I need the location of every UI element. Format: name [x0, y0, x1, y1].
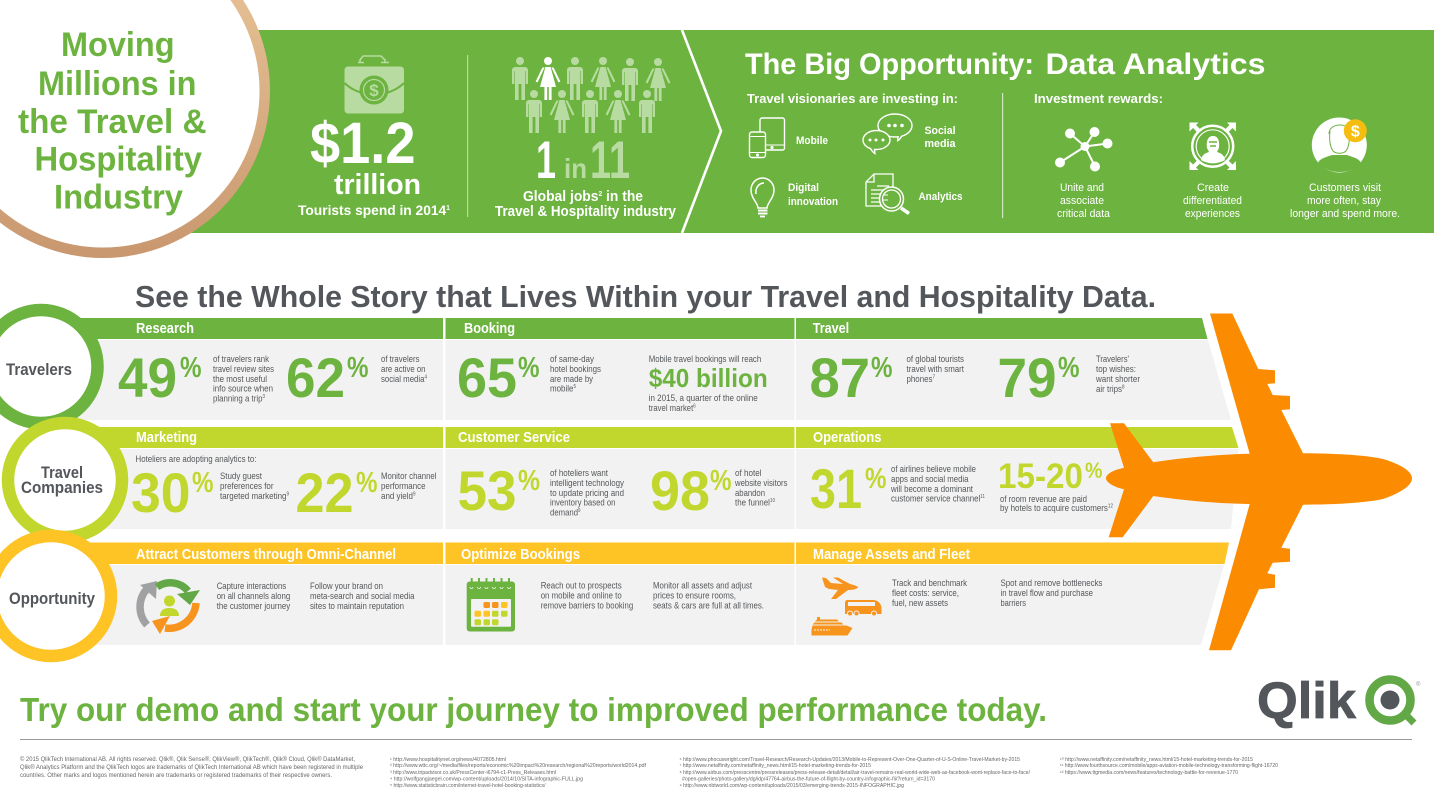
panel: manage assets and fleet — [812, 546, 1103, 636]
text: unite and associate — [1057, 182, 1111, 220]
panel: marketing: and yield — [381, 491, 419, 502]
panel: attract customers: Capture interactions — [217, 581, 286, 592]
panel: optimize bookings — [461, 546, 764, 632]
panel: booking: % — [518, 352, 540, 384]
panel: booking: $40 billion — [649, 363, 768, 393]
panel: customer service: 10 — [770, 498, 775, 504]
text: customers visit more often: longer and spend more. — [1290, 208, 1400, 220]
title: Hospitality — [34, 140, 202, 178]
heading: the big opportunity: Data Analytics — [1046, 48, 1266, 81]
panel: optimize bookings: Reach out to prospects — [541, 580, 622, 592]
stat: 1.2 trillion tourists spend: $1.2 — [310, 111, 416, 176]
stat: 1.2 trillion tourists spend: Tourists spend in 2014 — [298, 202, 449, 218]
circle: opportunity: Opportunity — [9, 589, 95, 608]
panel: marketing: 22 — [296, 461, 354, 524]
panel: travel: 7 — [932, 374, 935, 380]
panel: marketing: 9 — [413, 492, 416, 498]
panel: travel: Travel — [813, 320, 849, 337]
references column 2: ⁸ http://www.airbus.com/presscentre/pressreleases/press-release-detail/detail/air-travel-remains-real-world-wide-web-as-facebook-wont-replace-face-to-face/ — [680, 770, 1031, 776]
icon: customer with dollar coin: $ — [1351, 124, 1360, 140]
panel: manage assets and fleet: fleet costs: service, — [892, 588, 959, 599]
row backgrounds — [70, 427, 1238, 529]
panel: operations: of room revenue are paid — [1000, 494, 1087, 505]
panel: attract customers — [136, 546, 415, 634]
panel: travel: % — [871, 352, 893, 384]
panel: manage assets and fleet: Spot and remove bottlenecks — [1000, 578, 1103, 589]
panel: operations: 11 — [980, 494, 985, 500]
panel: booking: travel market — [649, 403, 704, 414]
references column 2: ⁹ http://www.nbtworld.com/wp-content/uploads/2015/03/emerging-trends-2015-INFOGRAPHIC.jpg — [680, 783, 904, 789]
row backgrounds — [60, 318, 1231, 420]
icon: small plane — [822, 578, 858, 599]
text: customers visit more often: Customers visit — [1309, 182, 1381, 194]
panel: marketing: Monitor channel — [381, 471, 436, 482]
references column 1: ⁴ http://wolfgangjaegel.com/wp-content/uploads/2014/10/SITA-infographic-FULL.jpg — [390, 776, 583, 782]
circle: travel companies — [8, 423, 122, 537]
panel: customer service: Customer Service — [458, 429, 570, 446]
panel: customer service: % — [518, 465, 540, 497]
panel: customer service: intelligent technology — [550, 478, 624, 489]
panel: marketing: performance — [381, 481, 426, 492]
panel: travel: air trips — [1096, 384, 1127, 395]
panel: manage assets and fleet: in travel flow and purchase — [1000, 588, 1093, 599]
panel: travel companies row — [70, 427, 1238, 529]
panel: operations: 12 — [1108, 504, 1113, 510]
references column 3: ¹² https://www.ttgmedia.com/news/features/technology-battle-for-revenue-1770 — [1060, 770, 1238, 776]
section heading: See the Whole Story that Lives Within your Travel and Hospitality Data. — [135, 279, 1156, 314]
icon: speech bubbles — [863, 114, 912, 154]
icon: customer with dollar coin — [1312, 118, 1367, 172]
panel: customer service: 53 — [458, 459, 516, 522]
panel: operations — [810, 429, 1113, 520]
panel: research: travel review sites — [213, 364, 274, 375]
text: create differentiated experiences: differentiated — [1183, 195, 1242, 207]
panel: travel: 87 — [810, 346, 870, 409]
label: mobile: Mobile — [796, 135, 828, 147]
stat: 1 in 11 global jobs — [495, 131, 676, 220]
heading: the big opportunity: The Big Opportunity: — [745, 48, 1034, 81]
stat: 1 in 11 global jobs: 11 — [590, 131, 630, 190]
panel: manage assets and fleet: barriers — [1000, 598, 1026, 609]
panel: research — [118, 320, 427, 409]
panel: optimize bookings: on mobile and online to — [541, 590, 622, 602]
panel: operations: of airlines believe mobile — [891, 464, 976, 475]
references column 1: ² http://www.wttc.org/~/media/files/reports/economic%20impact%20research/regional%20reports/world2014.pdf — [390, 763, 647, 769]
stat: 1 in 11 global jobs: 2 — [598, 191, 602, 198]
references column 2 — [680, 757, 1031, 789]
panel: marketing: targeted marketing — [220, 491, 300, 502]
panel: booking: 65 — [457, 346, 517, 409]
references column 1: ¹ http://www.hospitalitynet.org/news/4072805.html — [390, 757, 506, 763]
panel: operations: apps and social media — [891, 474, 969, 485]
text: create differentiated experiences: experiences — [1185, 208, 1240, 220]
legal copyright text: Qlik® Analytics Platform and the QlikTech logos are trademarks of QlikTech International AB which have been registered in multiple — [20, 764, 364, 771]
panel: operations: customer service channel — [891, 494, 1000, 504]
panel: marketing: 30 — [131, 461, 190, 524]
panel: travel: phones — [906, 374, 938, 385]
panel: attract customers: on all channels along — [217, 591, 290, 602]
panel: booking: hotel bookings — [550, 364, 601, 375]
subheading: investment rewards: Investment rewards: — [1034, 91, 1163, 106]
icon: briefcase with dollar — [344, 56, 404, 114]
panel: customer service: inventory based on — [550, 498, 616, 508]
stat: 1 in 11 global jobs: 1 — [536, 131, 556, 190]
panel: travel: Travelers' — [1096, 354, 1129, 365]
panel: research: info source when — [213, 384, 273, 394]
panel: customer service: to update pricing and — [550, 488, 624, 499]
text: create differentiated experiences — [1183, 182, 1242, 220]
title: the Travel & — [18, 103, 206, 141]
icon: cruise ship — [812, 617, 852, 636]
references column 1: ³ http://www.tripadvisor.co.uk/PressCenter-i6794-c1-Press_Releases.html — [390, 770, 556, 776]
panel: operations: % — [1085, 458, 1102, 483]
circle: travel companies: Companies — [21, 478, 103, 497]
references column 1 — [390, 757, 647, 789]
panel: attract customers: Attract Customers through Omni-Channel — [136, 546, 396, 563]
panel: marketing: Study guest — [220, 471, 262, 482]
chevron arrow divider — [682, 30, 721, 233]
panel: booking: 6 — [693, 404, 696, 410]
icon: bus — [845, 600, 882, 616]
icon: crowd of people, one highlighted — [512, 57, 670, 133]
panel: attract customers: meta-search and social media — [310, 591, 415, 602]
panel: research: planning a trip — [213, 394, 273, 404]
panel: travel: 79 — [998, 346, 1056, 409]
panel: customer service: website visitors — [734, 478, 788, 489]
icon: mobile devices — [750, 118, 784, 158]
panel: research: are active on — [381, 364, 426, 375]
references column 2: ⁷ http://www.netaffinity.com/netaffinity_news.html/15-hotel-marketing-trends-for-2015 — [680, 763, 871, 769]
panel: customer service: demand — [550, 508, 585, 518]
icon: briefcase with dollar: $ — [369, 81, 379, 100]
label: digital innovation: Digital — [788, 182, 819, 194]
label: digital innovation: innovation — [788, 196, 838, 208]
call to action: Try our demo and start your journey to improved performance today. — [20, 691, 1047, 728]
circle: opportunity — [0, 536, 111, 656]
panel: travelers row — [60, 318, 1231, 420]
panel: travel: of global tourists — [906, 354, 964, 365]
panel: research: social media — [381, 374, 434, 385]
legal copyright text: countries. Other marks and logos mentioned herein are trademarks or registered trademarks of their respective owners. — [20, 773, 332, 779]
text: unite and associate: critical data — [1057, 208, 1111, 220]
panel: optimize bookings: remove barriers to booking — [541, 600, 633, 612]
panel: operations: % — [865, 463, 887, 495]
panel: marketing: % — [192, 467, 214, 499]
panel: marketing — [131, 429, 436, 524]
references column 1: ⁵ http://www.statisticbrain.com/internet-travel-hotel-booking-statistics/ — [390, 783, 546, 789]
logo: Qlik: Qlik — [1257, 672, 1357, 729]
banner: key figures and big opportunity — [150, 30, 1434, 233]
panel: booking: Mobile travel bookings will reach — [649, 354, 761, 365]
circle: travelers: Travelers — [6, 360, 72, 379]
panel: research: 4 — [425, 374, 427, 380]
references column 2: ⁶ http://www.phocuswright.com/Travel-Research/Research-Updates/2013/Mobile-to-Represent-Over-One-Quarter-of-U-S-Online-Travel-Market-by-2015 — [680, 757, 1020, 763]
stat: 1.2 trillion tourists spend: trillion — [334, 169, 421, 201]
text: create differentiated experiences: Create — [1197, 182, 1229, 194]
panel: travel: % — [1058, 352, 1080, 384]
panel: customer service: 9 — [578, 508, 580, 514]
legal copyright text — [20, 756, 364, 779]
panel: optimize bookings: Optimize Bookings — [461, 546, 580, 563]
references column 3 — [1060, 757, 1278, 776]
panel: manage assets and fleet: Track and benchmark — [892, 578, 967, 589]
references column 2: #open-galleries/photo-gallery/dg/idp/47764-airbus-the-future-of-flight-by-country-infographic-fii/?return_id=3170 — [682, 776, 935, 782]
panel: attract customers: the customer journey — [217, 601, 290, 612]
panel: research: of travelers rank — [213, 354, 269, 365]
panel: research: 3 — [262, 394, 265, 400]
icon: customer cycle arrows — [140, 581, 200, 634]
stat: 1.2 trillion tourists spend — [298, 111, 450, 218]
circle: travel companies: Travel — [41, 463, 83, 482]
title circle — [0, 0, 270, 258]
stat: 1 in 11 global jobs: Travel & Hospitality industry — [495, 204, 676, 220]
icon: person in expanding frame — [1190, 122, 1236, 170]
panel: marketing: preferences for — [220, 481, 274, 492]
panel: travel: top wishes: — [1096, 364, 1136, 375]
panel: travel — [810, 320, 1141, 409]
panel: research: 49 — [118, 346, 177, 409]
stat: 1.2 trillion tourists spend: 1 — [446, 205, 450, 212]
text: unite and associate: Unite and — [1060, 182, 1104, 194]
panel: booking: Booking — [464, 320, 515, 337]
panel: customer service: % — [710, 465, 732, 497]
panel: optimize bookings: seats & cars are full at all times. — [653, 600, 764, 612]
panel: customer service: abandon — [735, 488, 765, 499]
legal copyright text: © 2015 QlikTech International AB. All rights reserved. Qlik®, Qlik Sense®, QlikView®, QlikTech®, Qlik® Cloud, Qlik® DataMarket, — [20, 756, 355, 763]
text: unite and associate: associate — [1060, 195, 1104, 207]
panel: opportunity row — [60, 542, 1229, 645]
title — [18, 26, 206, 216]
heading: the big opportunity — [745, 48, 1266, 81]
text: customers visit more often — [1290, 182, 1400, 220]
panel: booking: 5 — [573, 384, 576, 390]
panel: travel: travel with smart — [906, 364, 964, 375]
panel: booking: in 2015, a quarter of the online — [649, 393, 758, 404]
icon: network nodes — [1056, 128, 1112, 170]
panel: customer service: the funnel — [735, 498, 777, 508]
panel: booking — [457, 320, 768, 414]
panel: research: the most useful — [213, 374, 267, 385]
references column 3: ¹⁰ http://www.netaffinity.com/netaffinity_news.html/15-hotel-marketing-trends-for-2015 — [1060, 757, 1253, 763]
label: social media — [924, 125, 956, 150]
title: Moving — [61, 26, 174, 64]
title: Millions in — [38, 65, 196, 103]
panel: operations: will become a dominant — [890, 484, 973, 495]
panel: operations: 15-20 — [998, 457, 1083, 496]
panel: marketing: Hoteliers are adopting analytics to: — [136, 454, 256, 465]
stat: 1 in 11 global jobs: Global jobs — [523, 189, 602, 205]
panel: research: % — [347, 352, 369, 384]
text: customers visit more often: more often, stay — [1307, 195, 1381, 207]
panel: attract customers: Follow your brand on — [310, 581, 383, 592]
icon: document under magnifier — [866, 174, 909, 214]
label: social media: Social — [924, 125, 956, 137]
panel: customer service — [458, 429, 788, 522]
panel: operations: 31 — [810, 457, 862, 520]
panel: research: % — [180, 352, 202, 384]
stat: 1 in 11 global jobs: in — [564, 153, 587, 184]
panel: manage assets and fleet: Manage Assets and Fleet — [813, 546, 970, 563]
panel: customer service: of hotel — [735, 468, 762, 479]
panel: booking: of same-day — [550, 354, 594, 365]
panel: manage assets and fleet: fuel, new assets — [892, 598, 948, 609]
panel: marketing: % — [356, 467, 378, 499]
subheading: travel visionaries: Travel visionaries are investing in: — [747, 91, 958, 106]
panel: research: of travelers — [381, 354, 420, 365]
panel: travel: want shorter — [1095, 374, 1141, 385]
panel: marketing: Marketing — [136, 429, 197, 446]
panel: optimize bookings: prices to ensure rooms, — [653, 590, 736, 602]
panel: operations: by hotels to acquire customers — [1000, 503, 1130, 514]
panel: booking: mobile — [550, 384, 578, 394]
label: social media: media — [924, 138, 956, 150]
icon: light bulb — [751, 178, 774, 216]
panel: booking: are made by — [550, 374, 593, 385]
panel: customer service: of hoteliers want — [550, 468, 608, 479]
panel: operations: Operations — [813, 429, 882, 446]
panel: research: Research — [136, 320, 194, 337]
large orange airplane — [1106, 314, 1412, 650]
panel: marketing: 9 — [286, 492, 289, 498]
label: digital innovation — [788, 182, 838, 208]
panel: travel: 8 — [1122, 384, 1124, 390]
icon: calendar — [467, 578, 515, 632]
logo: Qlik — [1257, 672, 1421, 729]
label: analytics: Analytics — [918, 191, 962, 203]
stat: 1 in 11 global jobs: in the — [602, 189, 643, 205]
panel: attract customers: sites to maintain reputation — [310, 601, 404, 612]
panel: customer service: 98 — [650, 459, 710, 522]
title: Industry — [54, 178, 183, 216]
circle: travelers — [0, 310, 98, 423]
row backgrounds — [60, 542, 1229, 645]
panel: research: 62 — [286, 346, 345, 409]
logo: Qlik: ® — [1416, 681, 1421, 688]
references column 3: ¹¹ http://www.fourthsource.com/mobile/apps-aviation-mobile-technology-transforming-flight-16720 — [1060, 763, 1278, 769]
panel: optimize bookings: Monitor all assets and adjust — [653, 580, 752, 592]
